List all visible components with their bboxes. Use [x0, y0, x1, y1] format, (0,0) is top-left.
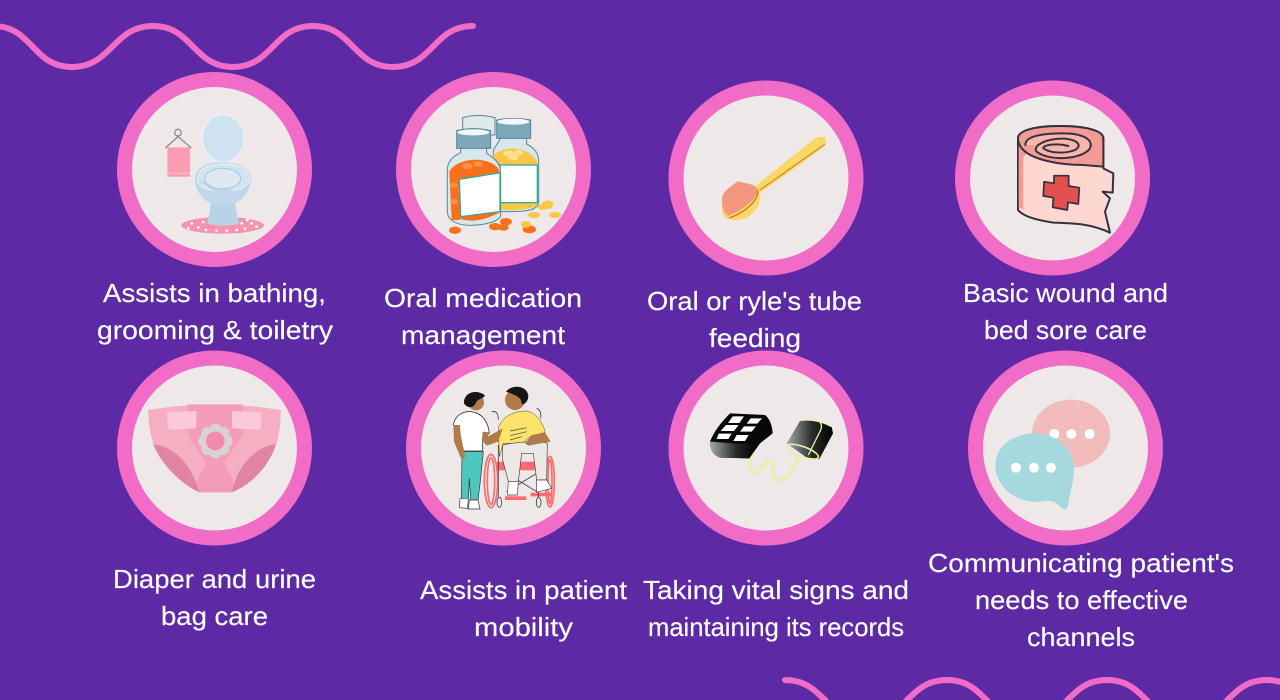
- label: mobility: [474, 612, 573, 642]
- label: [97, 278, 333, 345]
- icon: carer and wheelchair user: [453, 387, 554, 509]
- panel: bathing, grooming and toiletry: [97, 72, 333, 345]
- label: [963, 278, 1168, 345]
- panel: patient mobility: [406, 350, 628, 642]
- label: Oral medication: [384, 283, 582, 313]
- circle badge: [396, 72, 591, 267]
- bottom wave: [785, 680, 1280, 700]
- label: [420, 575, 628, 642]
- panel: oral medication: [384, 72, 591, 350]
- label: [647, 286, 862, 353]
- panel: tube feeding: [647, 80, 864, 353]
- label: bed sore care: [984, 315, 1147, 345]
- icon: bandage roll: [1018, 126, 1113, 233]
- label: Diaper and urine: [113, 564, 316, 594]
- label: needs to effective: [975, 585, 1188, 615]
- label: Assists in patient: [420, 575, 628, 605]
- label: [113, 564, 316, 631]
- panel: diaper care: [113, 350, 316, 631]
- circle badge: [406, 350, 601, 546]
- circle badge: [117, 72, 312, 267]
- icon: speech bubbles: [995, 400, 1110, 509]
- icon: blood pressure monitor: [710, 413, 833, 480]
- icon: toilet and towel: [165, 115, 264, 234]
- label: management: [401, 320, 566, 350]
- label: channels: [1027, 622, 1135, 652]
- icon: spoon: [722, 137, 826, 220]
- label: maintaining its records: [648, 612, 904, 642]
- label: Basic wound and: [963, 278, 1168, 308]
- circle badge: [117, 350, 312, 546]
- label: bag care: [161, 601, 268, 631]
- panel: wound care: [955, 80, 1168, 345]
- panel: communication: [928, 350, 1234, 652]
- label: feeding: [709, 323, 801, 353]
- label: grooming & toiletry: [97, 315, 333, 345]
- label: Oral or ryle's tube: [647, 286, 862, 316]
- label: [928, 548, 1234, 652]
- circle badge: [668, 80, 864, 276]
- icon: diaper: [148, 404, 281, 492]
- top wave: [0, 26, 473, 67]
- label: Assists in bathing,: [103, 278, 326, 308]
- label: [643, 575, 909, 642]
- circle badge: [968, 350, 1163, 546]
- label: [384, 283, 582, 350]
- circle badge: [955, 80, 1150, 276]
- panel: vital signs: [643, 350, 909, 642]
- label: Communicating patient's: [928, 548, 1234, 578]
- label: Taking vital signs and: [643, 575, 909, 605]
- icon: medicine bottles: [447, 115, 561, 234]
- circle badge: [668, 350, 864, 546]
